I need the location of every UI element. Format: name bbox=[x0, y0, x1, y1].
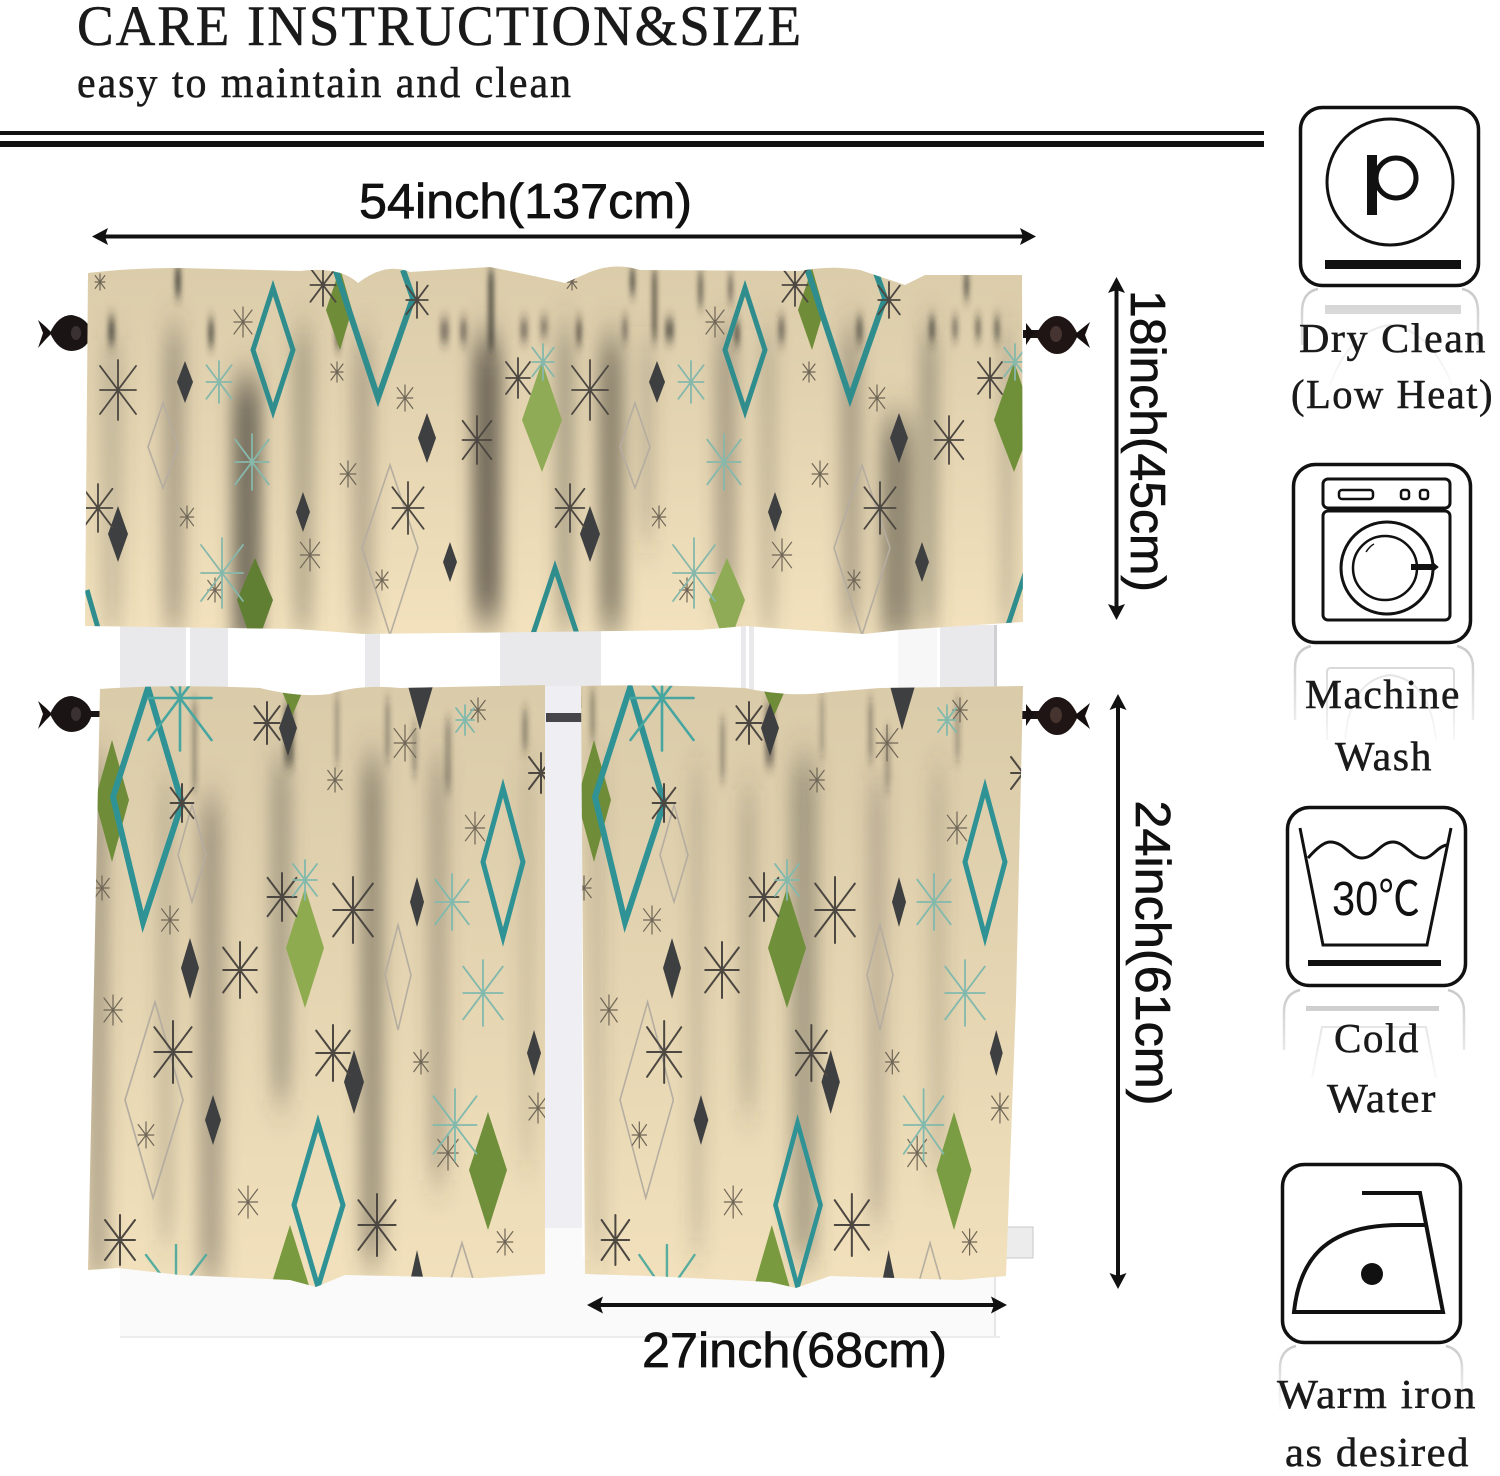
curtain rod finial: valance right bbox=[1023, 316, 1090, 354]
valance curtain bbox=[80, 260, 1051, 650]
curtain rod finial: valance left bbox=[38, 315, 94, 351]
header double rule bbox=[0, 131, 1264, 147]
window frame behind curtains bbox=[120, 625, 1033, 1338]
care panel: machine wash bbox=[1290, 464, 1478, 779]
label: warm iron: as desired bbox=[1285, 1429, 1470, 1475]
height arrow: 24 inch bbox=[1110, 694, 1126, 1289]
label: machine wash: Machine bbox=[1305, 671, 1461, 717]
label: cold water: Cold bbox=[1334, 1015, 1420, 1061]
label: 18 inch height: 18inch(45cm) bbox=[1120, 290, 1174, 592]
label: warm iron: Warm iron bbox=[1277, 1371, 1477, 1417]
icon reflection: dry clean bbox=[1296, 288, 1484, 408]
icon: machine wash bbox=[1294, 464, 1470, 642]
curtain rod finial: tier right bbox=[1021, 697, 1090, 735]
label: 24 inch height: 24inch(61cm) bbox=[1125, 800, 1179, 1106]
icon: cold water bbox=[1288, 808, 1466, 986]
label: machine wash: Wash bbox=[1335, 733, 1433, 779]
icon reflection: machine wash bbox=[1290, 645, 1478, 760]
label: dry clean: Dry Clean bbox=[1299, 315, 1487, 361]
icon: cold water: 30℃ bbox=[1332, 873, 1420, 926]
width arrow: 27 inch bbox=[587, 1296, 1007, 1314]
icon: dry clean bbox=[1300, 108, 1478, 286]
width arrow: 54 inch bbox=[92, 228, 1036, 245]
left tier curtain bbox=[88, 685, 545, 1287]
curtain rod finial: tier left bbox=[38, 696, 102, 732]
label: dry clean: (Low Heat) bbox=[1291, 371, 1494, 417]
label: 54 inch width: 54inch(137cm) bbox=[359, 175, 692, 229]
care panel: warm iron bbox=[1276, 1164, 1477, 1475]
label: machine wash bbox=[1305, 671, 1461, 779]
label: 27 inch width: 27inch(68cm) bbox=[642, 1324, 947, 1378]
care panel: cold water bbox=[1280, 808, 1470, 1121]
label: cold water bbox=[1327, 1015, 1437, 1121]
right tier curtain bbox=[575, 642, 1036, 1348]
icon reflection: cold water bbox=[1280, 988, 1470, 1096]
label: dry clean bbox=[1291, 315, 1494, 417]
label: warm iron bbox=[1277, 1371, 1477, 1475]
care panel: dry clean bbox=[1291, 108, 1494, 417]
height arrow: 18 inch bbox=[1108, 277, 1125, 620]
icon reflection: warm iron bbox=[1276, 1344, 1466, 1414]
label: cold water: Water bbox=[1327, 1075, 1437, 1121]
icon: warm iron bbox=[1282, 1164, 1460, 1342]
subtitle: easy to maintain and clean bbox=[77, 60, 573, 107]
